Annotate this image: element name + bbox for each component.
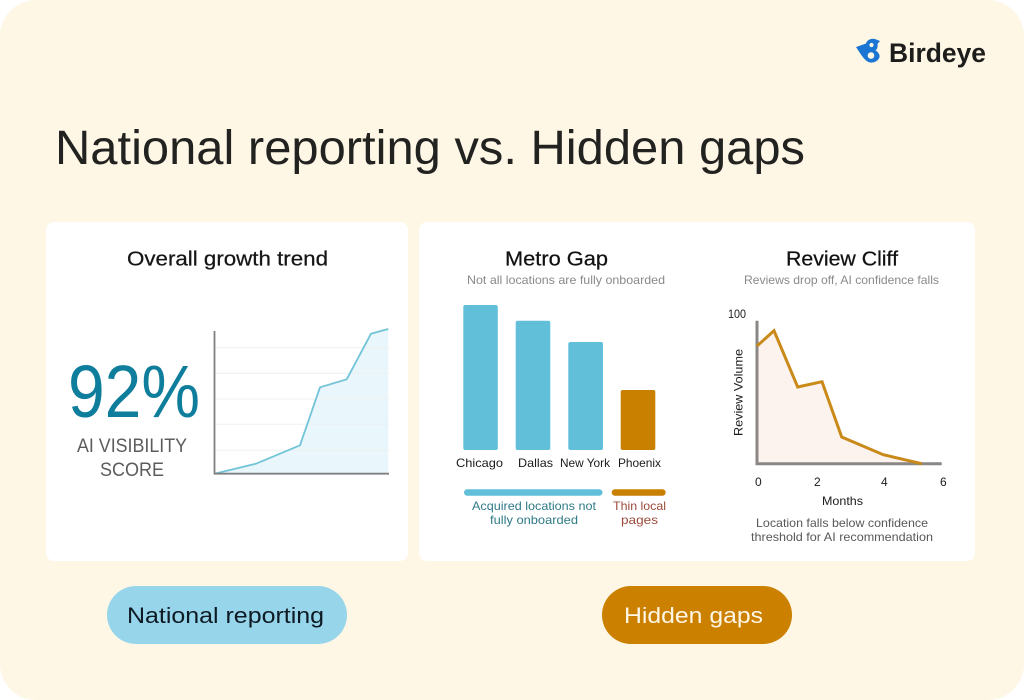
legend: thin local pages: pages — [621, 513, 658, 527]
x-axis ticks: 0 — [755, 475, 762, 489]
bar chart: metro gap: New York — [560, 456, 611, 470]
chart note — [751, 516, 933, 544]
pill: National reporting — [107, 586, 347, 644]
legend: thin local pages: Thin local — [613, 499, 666, 513]
bar chart: metro gap — [456, 305, 661, 470]
heading: Review Cliff: Review Cliff — [786, 248, 898, 270]
y-axis maximum: 100 — [728, 307, 746, 321]
y-axis title: Review Volume — [732, 349, 746, 436]
title: National reporting vs. Hidden gaps — [55, 122, 805, 175]
legend: thin local pages — [612, 489, 666, 527]
bar chart: metro gap: Chicago — [456, 456, 503, 470]
x-axis title: Months — [822, 494, 863, 508]
metric: 92%: 92% — [68, 350, 200, 433]
panel heading: Overall growth trend — [127, 248, 328, 270]
panel: national reporting — [46, 222, 408, 561]
legend: acquired locations: fully onboarded — [490, 513, 578, 527]
bar chart: metro gap: Dallas — [518, 456, 553, 470]
pill: National reporting: National reporting — [127, 603, 324, 628]
x-axis ticks: 6 — [940, 475, 947, 489]
metric label — [77, 436, 187, 481]
line chart: growth trend — [214, 329, 389, 474]
logo: Birdeye — [856, 38, 986, 68]
icon: bird — [856, 39, 880, 63]
panel: hidden gaps — [419, 222, 975, 561]
subtitle: Review Cliff: Reviews drop off, AI confidence falls — [744, 273, 939, 287]
legend: acquired locations — [464, 489, 602, 527]
legend: acquired locations: Acquired locations not — [472, 499, 597, 513]
heading: Metro Gap: Metro Gap — [505, 248, 608, 270]
x-axis ticks: 2 — [814, 475, 821, 489]
x-axis ticks: 4 — [881, 475, 888, 489]
metric label: AI VISIBILITY — [77, 436, 187, 457]
bar chart: metro gap: Phoenix — [618, 456, 661, 470]
subtitle: Metro Gap: Not all locations are fully onboarded — [467, 273, 665, 287]
x-axis ticks — [755, 475, 947, 489]
chart note: Location falls below confidence — [756, 516, 928, 530]
metric label: SCORE — [100, 460, 164, 481]
logo wordmark: Birdeye — [889, 38, 986, 68]
chart note: threshold for AI recommendation — [751, 530, 933, 544]
line chart: review cliff — [728, 307, 947, 508]
pill: Hidden gaps — [602, 586, 792, 644]
pill: Hidden gaps: Hidden gaps — [624, 603, 763, 628]
